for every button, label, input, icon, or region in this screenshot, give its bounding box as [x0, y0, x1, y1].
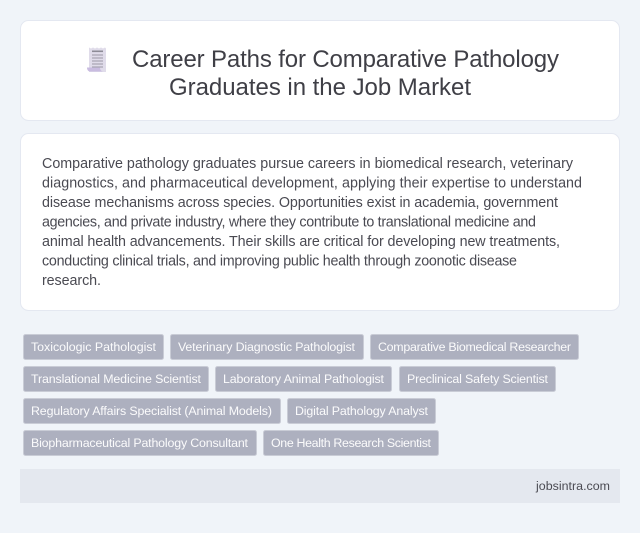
description text: animal health advancements. Their skills are critical for developing new treatments,	[42, 234, 560, 250]
description text: Comparative pathology graduates pursue careers in biomedical research, veterinary	[42, 156, 574, 172]
description text: disease mechanisms across species. Opportunities exist in academia, government	[42, 195, 558, 211]
tag: Comparative Biomedical Researcher: Comparative Biomedical Researcher	[378, 340, 571, 354]
tag: One Health Research Scientist	[264, 430, 438, 456]
tag: Regulatory Affairs Specialist (Animal Models)	[24, 398, 280, 424]
description text	[42, 156, 582, 289]
tag: Digital Pathology Analyst: Digital Pathology Analyst	[295, 404, 429, 418]
tag: Translational Medicine Scientist: Translational Medicine Scientist	[31, 372, 202, 386]
tag: One Health Research Scientist: One Health Research Scientist	[271, 436, 432, 450]
tag: Translational Medicine Scientist	[24, 366, 208, 392]
tag: Digital Pathology Analyst	[288, 398, 436, 424]
tag: Veterinary Diagnostic Pathologist: Veterinary Diagnostic Pathologist	[178, 340, 356, 354]
tag: Biopharmaceutical Pathology Consultant	[24, 430, 256, 456]
footer source text: jobsintra.com	[535, 479, 610, 493]
title	[132, 46, 559, 101]
title: Career Paths for Comparative Pathology	[132, 46, 559, 73]
icon: document scroll	[87, 48, 106, 72]
tag: Biopharmaceutical Pathology Consultant: Biopharmaceutical Pathology Consultant	[31, 436, 249, 450]
description text: agencies, and private industry, where they contribute to translational medicine and	[42, 214, 536, 230]
title: Graduates in the Job Market	[169, 74, 471, 101]
description text: conducting clinical trials, and improving public health through zoonotic disease	[42, 254, 517, 270]
header panel	[20, 20, 620, 120]
description panel	[20, 134, 620, 310]
tag: Preclinical Safety Scientist: Preclinical Safety Scientist	[407, 372, 549, 386]
tag: Comparative Biomedical Researcher	[370, 334, 578, 360]
footer bar	[20, 469, 620, 503]
tag: Toxicologic Pathologist	[24, 334, 164, 360]
tag: Laboratory Animal Pathologist: Laboratory Animal Pathologist	[223, 372, 385, 386]
description text: research.	[42, 273, 101, 289]
tag: Toxicologic Pathologist: Toxicologic Pathologist	[31, 340, 157, 354]
tag: Preclinical Safety Scientist	[400, 366, 556, 392]
description text: diagnostics, and pharmaceutical development, applying their expertise to understand	[42, 176, 582, 192]
career tags	[24, 334, 578, 456]
tag: Veterinary Diagnostic Pathologist	[170, 334, 364, 360]
tag: Regulatory Affairs Specialist (Animal Models): Regulatory Affairs Specialist (Animal Models)	[31, 404, 272, 418]
tag: Laboratory Animal Pathologist	[216, 366, 392, 392]
